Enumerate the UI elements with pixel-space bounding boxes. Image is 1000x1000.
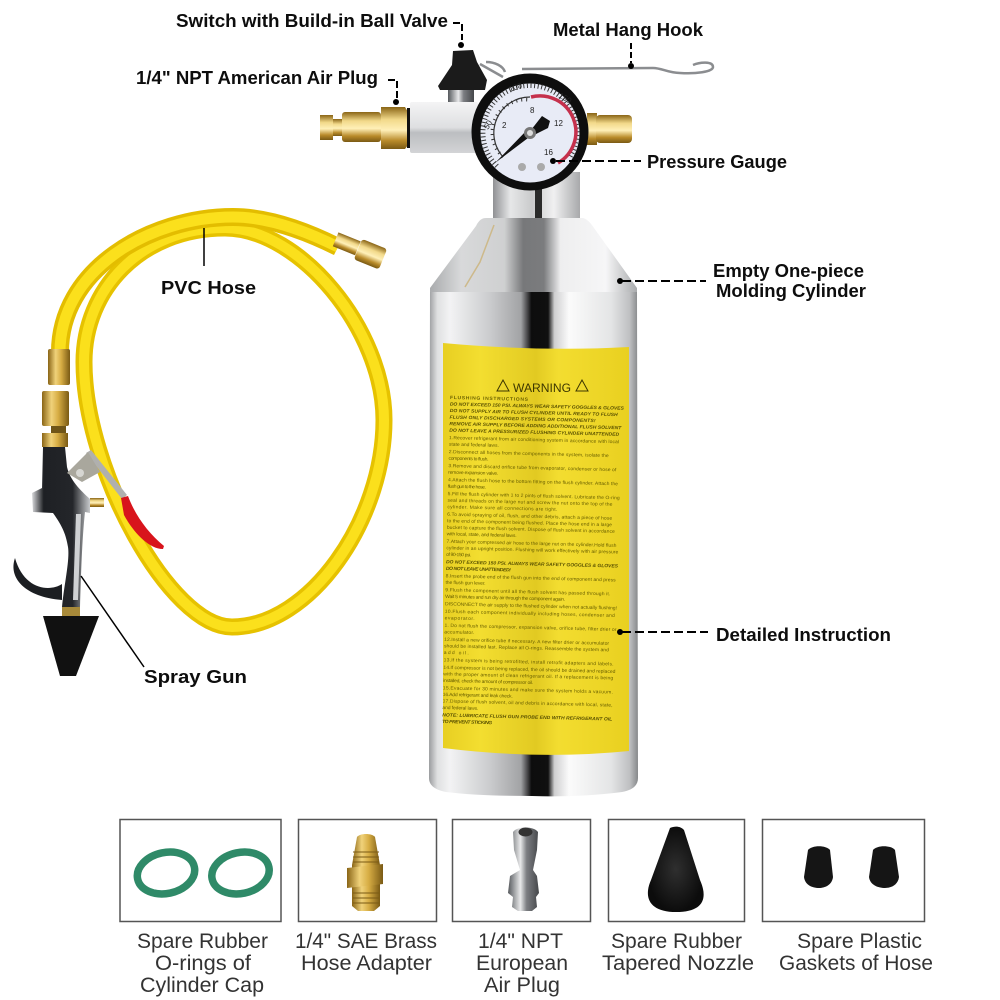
warning body text: REMOVE AIR SUPPLY BEFORE ADDING ADDITIONAL FLUSH SOLVENT: [449, 421, 623, 431]
warning body text: 5.Fill the flush cylinder with 1 to 2 pints of flush solvent. Lubricate the O-ring: [448, 491, 620, 501]
warning body text: accumulator.: [444, 629, 474, 636]
cylinder label: [442, 343, 629, 755]
icon: gaskets: [804, 846, 899, 888]
warning body text: 15.Evacuate for 30 minutes and make sure the system holds a vacuum.: [443, 685, 613, 695]
gun hook: [13, 558, 62, 600]
leader: instruction: [617, 629, 708, 635]
accessory panel: brass adapter: [295, 820, 437, 975]
black ball valve knob: [438, 50, 487, 90]
caption: 1/4" SAE Brass: [295, 929, 437, 953]
warning body text: 3.Remove and discard orifice tube from evaporator, condenser or hose of: [448, 463, 617, 473]
caption: Gaskets of Hose: [779, 951, 933, 975]
caption: Cylinder Cap: [140, 973, 264, 997]
warning body text: of 90-150 psi.: [446, 552, 471, 558]
accessory panel: o-rings: [120, 820, 281, 997]
icon: o-rings: [133, 847, 273, 899]
warning body text: 16.Add refrigerant and leak check.: [443, 692, 513, 700]
accessory panel: gaskets: [762, 820, 933, 975]
caption: [295, 929, 437, 975]
warning body text: installed, check the amount of compressor oil.: [443, 678, 533, 686]
warning body text: [442, 395, 625, 729]
warning body text: 13.If the system is being retrofitted, install retrofit adapters and labels.: [444, 657, 614, 667]
caption: [476, 929, 568, 997]
warning body text: with local, state, and federal laws.: [447, 531, 517, 539]
caption: Spare Plastic: [797, 929, 922, 953]
warning body text: NOTE: LUBRICATE FLUSH GUN PROBE END WITH REFRIGERANT OIL: [442, 713, 612, 723]
hose: yellow PVC hose loop: [60, 217, 384, 627]
caption: [602, 929, 754, 975]
leader: cylinder: [617, 278, 706, 284]
accessory panel: air plug: [452, 820, 590, 997]
gun red lever grip: [121, 496, 164, 549]
cylinder neck: [493, 172, 580, 220]
warning body text: cylinder in an upright position. Flushing will work effectively with air pressure: [446, 545, 619, 555]
warning body text: evaporator.: [445, 615, 475, 622]
gun brass pin: [90, 498, 104, 507]
gauge outer scale: [483, 85, 577, 166]
leader: spray gun: [81, 576, 144, 667]
warning heading: WARNING: [513, 381, 571, 395]
caption: 1/4" NPT: [478, 929, 563, 953]
warning body text: remove expansion valve.: [448, 470, 498, 477]
warning body text: 2.Disconnect all hoses from the components in the system, isolate the: [449, 449, 609, 459]
warning body text: 1.Recover refrigerant from air conditioning system in accordance with local: [449, 435, 619, 445]
gauge numbers: 100: [508, 81, 524, 94]
hose end fitting: [333, 232, 387, 269]
cylinder shoulder: [430, 218, 637, 292]
gauge numbers: 2: [502, 121, 507, 130]
caption: Air Plug: [484, 973, 560, 997]
warning body text: DO NOT EXCEED 150 PSI. ALWAYS WEAR SAFETY GOGGLES & GLOVES: [446, 559, 619, 569]
label: air plug: 1/4" NPT American Air Plug: [136, 67, 378, 88]
warning body text: FLUSH ONLY DISCHARGED SYSTEMS OR COMPONENTS!: [449, 415, 596, 424]
caption: Spare Rubber: [137, 929, 268, 953]
gauge red arc: [531, 96, 576, 163]
gauge numbers: 16: [544, 148, 553, 157]
caption: Spare Rubber: [611, 929, 742, 953]
valve body: [448, 88, 474, 104]
gun barrel highlight: [73, 514, 81, 600]
gauge numbers: 12: [554, 119, 563, 128]
gauge needle: [495, 116, 550, 163]
label: cylinder: Empty One-piece: [713, 260, 864, 281]
warning body text: DO NOT SUPPLY AIR TO FLUSH CYLINDER UNTIL READY TO FLUSH: [450, 408, 618, 418]
icon: brass adapter: [347, 834, 383, 911]
icon: tapered nozzle: [648, 827, 704, 912]
caption: Tapered Nozzle: [602, 951, 754, 975]
warning body text: 7.Attach your compressed air hose to the large nut on the cylinder.Hold flush: [446, 539, 617, 549]
caption: [779, 929, 933, 975]
warning body text: TO PREVENT STICKING: [442, 719, 492, 726]
gun body: [32, 447, 90, 607]
warning body text: 10.Flush each component individually including hoses, condenser and: [445, 609, 615, 619]
warning body text: components to flush.: [448, 456, 489, 463]
cylinder: [429, 172, 638, 796]
label: cylinder: [713, 260, 866, 301]
leader: ball valve: [453, 23, 464, 48]
label: instruction: Detailed Instruction: [716, 624, 891, 645]
gauge small dials: [518, 163, 526, 171]
warning body text: 4.Attach the flush hose to the bottom fitting on the flush cylinder. Attach the: [448, 477, 618, 487]
warning body text: the flush gun lever.: [445, 580, 486, 587]
warning body text: flush gun to the hose.: [448, 484, 486, 491]
air plug: [320, 107, 410, 149]
hang hook: [480, 62, 713, 77]
gauge numbers: 8: [530, 106, 535, 115]
caption: European: [476, 951, 568, 975]
warning body text: 12.Install a new orifice tube if necessary. A new filter drier or accumulator: [444, 637, 610, 647]
warning body text: 14.If compressor is not being replaced, the oil should be drained and replaced: [443, 665, 616, 675]
leader: PVC hose: [203, 228, 205, 266]
label: cylinder: Molding Cylinder: [716, 280, 866, 301]
accessory panel: tapered nozzle: [602, 820, 754, 975]
pressure gauge: [472, 74, 588, 190]
caption: O-rings of: [155, 951, 251, 975]
caption: Hose Adapter: [301, 951, 432, 975]
gun trigger plate: [67, 452, 100, 482]
warning body text: 9.Flush the component until all the flush solvent has passed through it.: [445, 587, 610, 597]
gauge numbers: [482, 81, 574, 157]
label: ball valve: Switch with Build-in Ball Valve: [176, 10, 448, 31]
gun brass tip: [62, 607, 80, 616]
warning body text: state and federal laws.: [449, 442, 499, 449]
warning body text: and federal laws.: [442, 705, 479, 712]
warning body text: DISCONNECT the air supply to the flushed cylinder when not actually flushing!: [445, 601, 617, 611]
cylinder body: [429, 292, 638, 796]
warning body text: add oil.: [444, 650, 469, 656]
gauge inner scale: [494, 97, 530, 157]
warning body text: seal and threads on the large nut and screw the nut onto the top of the: [447, 498, 613, 508]
label: PVC Hose: PVC Hose: [161, 277, 256, 298]
label: Spray Gun: Spray Gun: [144, 666, 247, 687]
warning body text: 1. Do not flush the compressor, expansion valve, orifice tube, filter drier or: [444, 623, 617, 633]
warning body text: DO NOT LEAVE A PRESSURIZED FLUSHING CYLINDER UNATTENDED: [449, 428, 620, 438]
label: pressure gauge: Pressure Gauge: [647, 151, 787, 172]
silver manifold block: [410, 102, 478, 153]
icon: air plug: [508, 828, 539, 911]
warning body text: with the proper amount of clean refrigerant oil. If a replacement is being: [443, 671, 614, 681]
warning body text: FLUSHING INSTRUCTIONS: [450, 395, 529, 403]
cylinder stem: [535, 185, 542, 218]
gun brass connector: [42, 349, 70, 447]
shoulder streak: [465, 225, 494, 287]
warning body text: 8.Insert the probe end of the flush gun into the end of component and press: [446, 573, 616, 583]
warning body text: bucket to capture the flush solvent. Dispose of flush solvent in accordance: [447, 525, 615, 535]
caption: [137, 929, 268, 997]
warning body text: should be installed last. Replace all O-rings. Reassemble the system and: [444, 643, 609, 653]
gauge numbers: 150: [557, 91, 574, 106]
warning body text: 17.Dispose of flush solvent, oil and debris in accordance with local, state,: [443, 699, 613, 709]
gun rubber cone: [43, 616, 99, 676]
leader: air plug: [388, 80, 399, 105]
leader: hang hook: [628, 43, 634, 69]
warning body text: DO NOT EXCEED 150 PSI. ALWAYS WEAR SAFETY GOGGLES & GLOVES: [450, 402, 625, 412]
right brass fitting: [587, 113, 632, 145]
label: hang hook: Metal Hang Hook: [553, 19, 704, 40]
warning body text: 6.To avoid spraying of oil, flush, and other debris, attach a piece of hose: [447, 512, 613, 522]
warning body text: DO NOT LEAVE UNATTENDED!: [446, 566, 511, 573]
warning body text: Wait 5 minutes and run dry air through the component again.: [445, 594, 565, 603]
warning body text: cylinder. Make sure all connections are tight.: [447, 504, 557, 513]
warning body text: to the end of the component being flushed. Place the hose end in a large: [447, 518, 612, 528]
gun lever: [86, 450, 127, 499]
leader: pressure gauge: [550, 158, 641, 164]
spray gun: [13, 349, 164, 676]
gauge numbers: 50: [482, 118, 494, 131]
warning triangles: [497, 380, 588, 391]
